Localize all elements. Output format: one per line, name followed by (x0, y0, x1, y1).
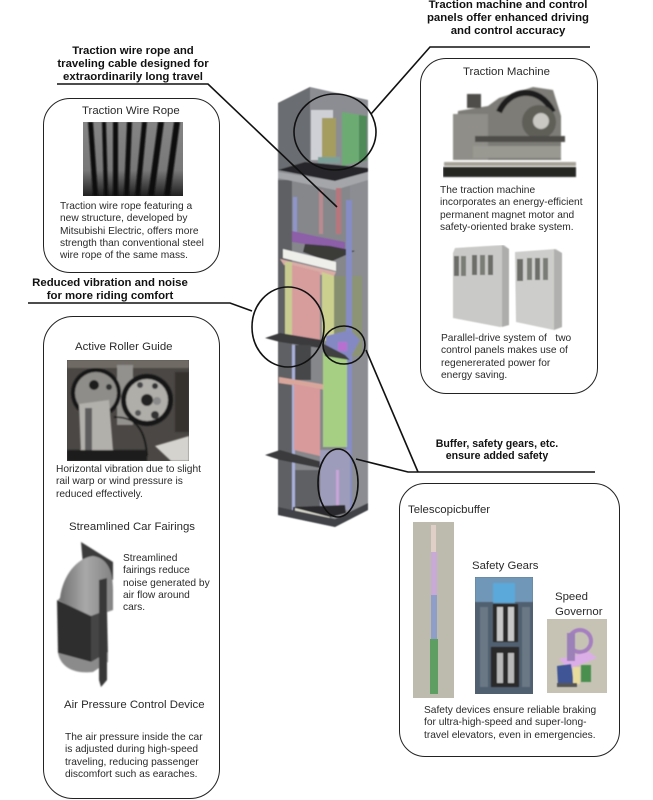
text: traction machine description: The traction machine (440, 185, 535, 196)
heading: traction wire rope and cable (57, 44, 209, 83)
heading: traction wire rope and cable: extraordinarily long travel (63, 71, 203, 83)
text: control panels description: control panels makes use of (441, 345, 568, 356)
heading: traction wire rope and cable: traveling cable designed for (57, 58, 209, 70)
text: wire rope description (60, 201, 204, 261)
leader: traction machine (371, 47, 590, 114)
panel: riding comfort (43, 316, 220, 799)
text: wire rope description: wire rope of the same mass. (60, 250, 188, 261)
car top (292, 231, 345, 250)
text: air pressure description: The air pressure inside the car (65, 732, 203, 743)
text: roller guide description: Horizontal vibration due to slight (56, 464, 201, 475)
heading: speed governor (555, 591, 602, 618)
shaft body (278, 87, 368, 527)
lower landing slab (265, 450, 322, 468)
callout circle: governor (323, 326, 365, 364)
heading: reduced vibration and noise: for more riding comfort (47, 290, 173, 302)
leader: riding comfort (28, 303, 252, 311)
text: air pressure description: discomfort such as earaches. (65, 769, 198, 780)
text: fairings description: cars. (123, 602, 145, 613)
text: air pressure description: traveling, reducing passenger (65, 757, 199, 768)
text: control panels description: regenererated power for (441, 358, 550, 369)
text: safety devices description (424, 705, 596, 741)
callout circle: traction machine (294, 94, 376, 170)
upper landing slab (265, 333, 322, 348)
leader: governor (366, 350, 418, 472)
text: fairings description: noise generated by (123, 578, 210, 589)
text: control panels description (441, 333, 571, 381)
heading: reduced vibration and noise (32, 276, 188, 302)
photo: traction machine (443, 86, 577, 178)
text: fairings description (123, 553, 210, 613)
illustration: elevator shaft cutaway (265, 86, 369, 528)
pit (320, 450, 350, 510)
text: air pressure description: is adjusted during high-speed (65, 744, 198, 755)
text: safety devices description: for ultra-high-speed and super-long- (424, 717, 587, 728)
heading: traction machine: Traction Machine (463, 66, 550, 78)
text: air pressure description (65, 732, 203, 780)
heading: traction machine and control panels: and control accuracy (451, 25, 565, 37)
ropes (319, 190, 323, 234)
text: wire rope description: Mitsubishi Electric, offers more (60, 226, 199, 237)
lower car (294, 384, 320, 456)
panel: traction machine (420, 58, 598, 394)
lower hoistway (292, 345, 295, 515)
text: wire rope description: strength than conventional steel (60, 238, 204, 249)
leader: wire rope (57, 84, 337, 207)
heading: buffer and safety gears: ensure added safety (446, 450, 548, 462)
callout circle: car vibration (252, 287, 324, 367)
heading: traction machine and control panels: panels offer enhanced driving (427, 12, 589, 24)
heading: safety gears: Safety Gears (472, 560, 538, 572)
photo: safety gears (475, 577, 533, 694)
text: fairings description: air flow around (123, 590, 190, 601)
machine floor (278, 162, 368, 181)
text: safety devices description: Safety devices ensure reliable braking (424, 705, 596, 716)
counterweight (323, 352, 347, 447)
heading: traction wire rope: Traction Wire Rope (82, 105, 180, 117)
text: safety devices description: travel elevators, even in emergencies. (424, 730, 596, 741)
illustration: speed governor (547, 619, 607, 693)
text: roller guide description (56, 464, 201, 500)
text: roller guide description: reduced effectively. (56, 489, 143, 500)
heading: active roller guide: Active Roller Guide (75, 341, 172, 353)
panel: safety devices (399, 483, 620, 757)
machine room (311, 110, 333, 160)
heading: speed governor: Governor (555, 606, 602, 618)
text: fairings description: Streamlined (123, 553, 177, 564)
callout circle: buffer (318, 449, 358, 517)
text: traction machine description: safety-oriented brake system. (440, 222, 574, 233)
heading: speed governor: Speed (555, 591, 588, 603)
mid beam (279, 377, 333, 391)
photo: active roller guide (67, 360, 189, 461)
text: roller guide description: rail warp or wind pressure is (56, 476, 183, 487)
heading: traction wire rope and cable: Traction wire rope and (72, 44, 194, 56)
heading: buffer and safety gears: Buffer, safety gears, etc. (436, 438, 558, 450)
governor area (326, 330, 360, 358)
text: traction machine description (440, 185, 583, 233)
panel: traction wire rope (43, 98, 220, 273)
heading: reduced vibration and noise: Reduced vibration and noise (32, 276, 188, 288)
illustration: car fairing (56, 541, 114, 688)
upper car (285, 262, 292, 338)
illustration: telescopic buffer (413, 522, 454, 698)
leader: buffer (356, 459, 595, 472)
heading: telescopic buffer: Telescopicbuffer (408, 504, 490, 516)
heading: air pressure control device: Air Pressure Control Device (64, 699, 205, 711)
text: wire rope description: new structure, developed by (60, 213, 187, 224)
heading: buffer and safety gears (436, 438, 558, 462)
text: traction machine description: permanent magnet motor and (440, 210, 574, 221)
heading: streamlined car fairings: Streamlined Car Fairings (69, 521, 195, 533)
text: wire rope description: Traction wire rope featuring a (60, 201, 192, 212)
heading: traction machine and control panels (427, 0, 589, 37)
text: control panels description: Parallel-drive system of two (441, 333, 571, 344)
text: traction machine description: incorporates an energy-efficient (440, 197, 583, 208)
text: fairings description: fairings reduce (123, 565, 190, 576)
photo: wire rope strands (83, 122, 183, 196)
photo: two control panels (452, 245, 562, 330)
text: control panels description: energy saving. (441, 370, 507, 381)
